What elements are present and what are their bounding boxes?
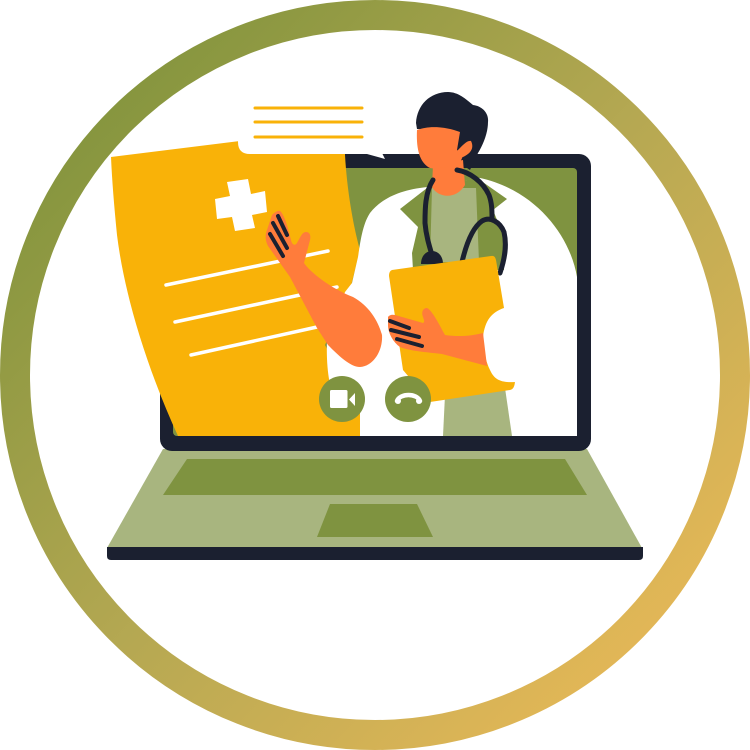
stethoscope: [425, 170, 505, 273]
screen bezel: [160, 154, 591, 451]
stethoscope chest piece: [421, 251, 443, 264]
laptop front edge: [107, 547, 643, 560]
white coat: [327, 178, 577, 436]
speech bubble lines: [255, 108, 362, 137]
document text lines: [166, 251, 337, 355]
neck: [432, 160, 465, 196]
screen: [173, 168, 577, 436]
right hand fingers: [390, 321, 422, 346]
doctor: [266, 92, 577, 436]
medical document: [111, 128, 360, 436]
document sheet: [111, 128, 360, 436]
ear: [457, 141, 472, 157]
laptop base: [107, 449, 642, 548]
lapel: [400, 178, 507, 270]
left hand fingers: [270, 216, 287, 256]
left hand and arm: [266, 211, 382, 367]
medical cross: [215, 179, 267, 231]
speech bubble: [238, 84, 385, 159]
end call button: [385, 376, 431, 422]
clipboard: [389, 256, 515, 402]
laptop: [107, 154, 643, 560]
scrub trousers: [443, 388, 512, 436]
scrub top: [430, 188, 479, 262]
coat sleeve: [483, 300, 530, 382]
hair: [416, 92, 488, 170]
keyboard: [163, 459, 587, 495]
face: [417, 127, 463, 168]
video call button: [319, 376, 365, 422]
trackpad: [317, 504, 433, 537]
right hand and forearm: [388, 308, 487, 366]
